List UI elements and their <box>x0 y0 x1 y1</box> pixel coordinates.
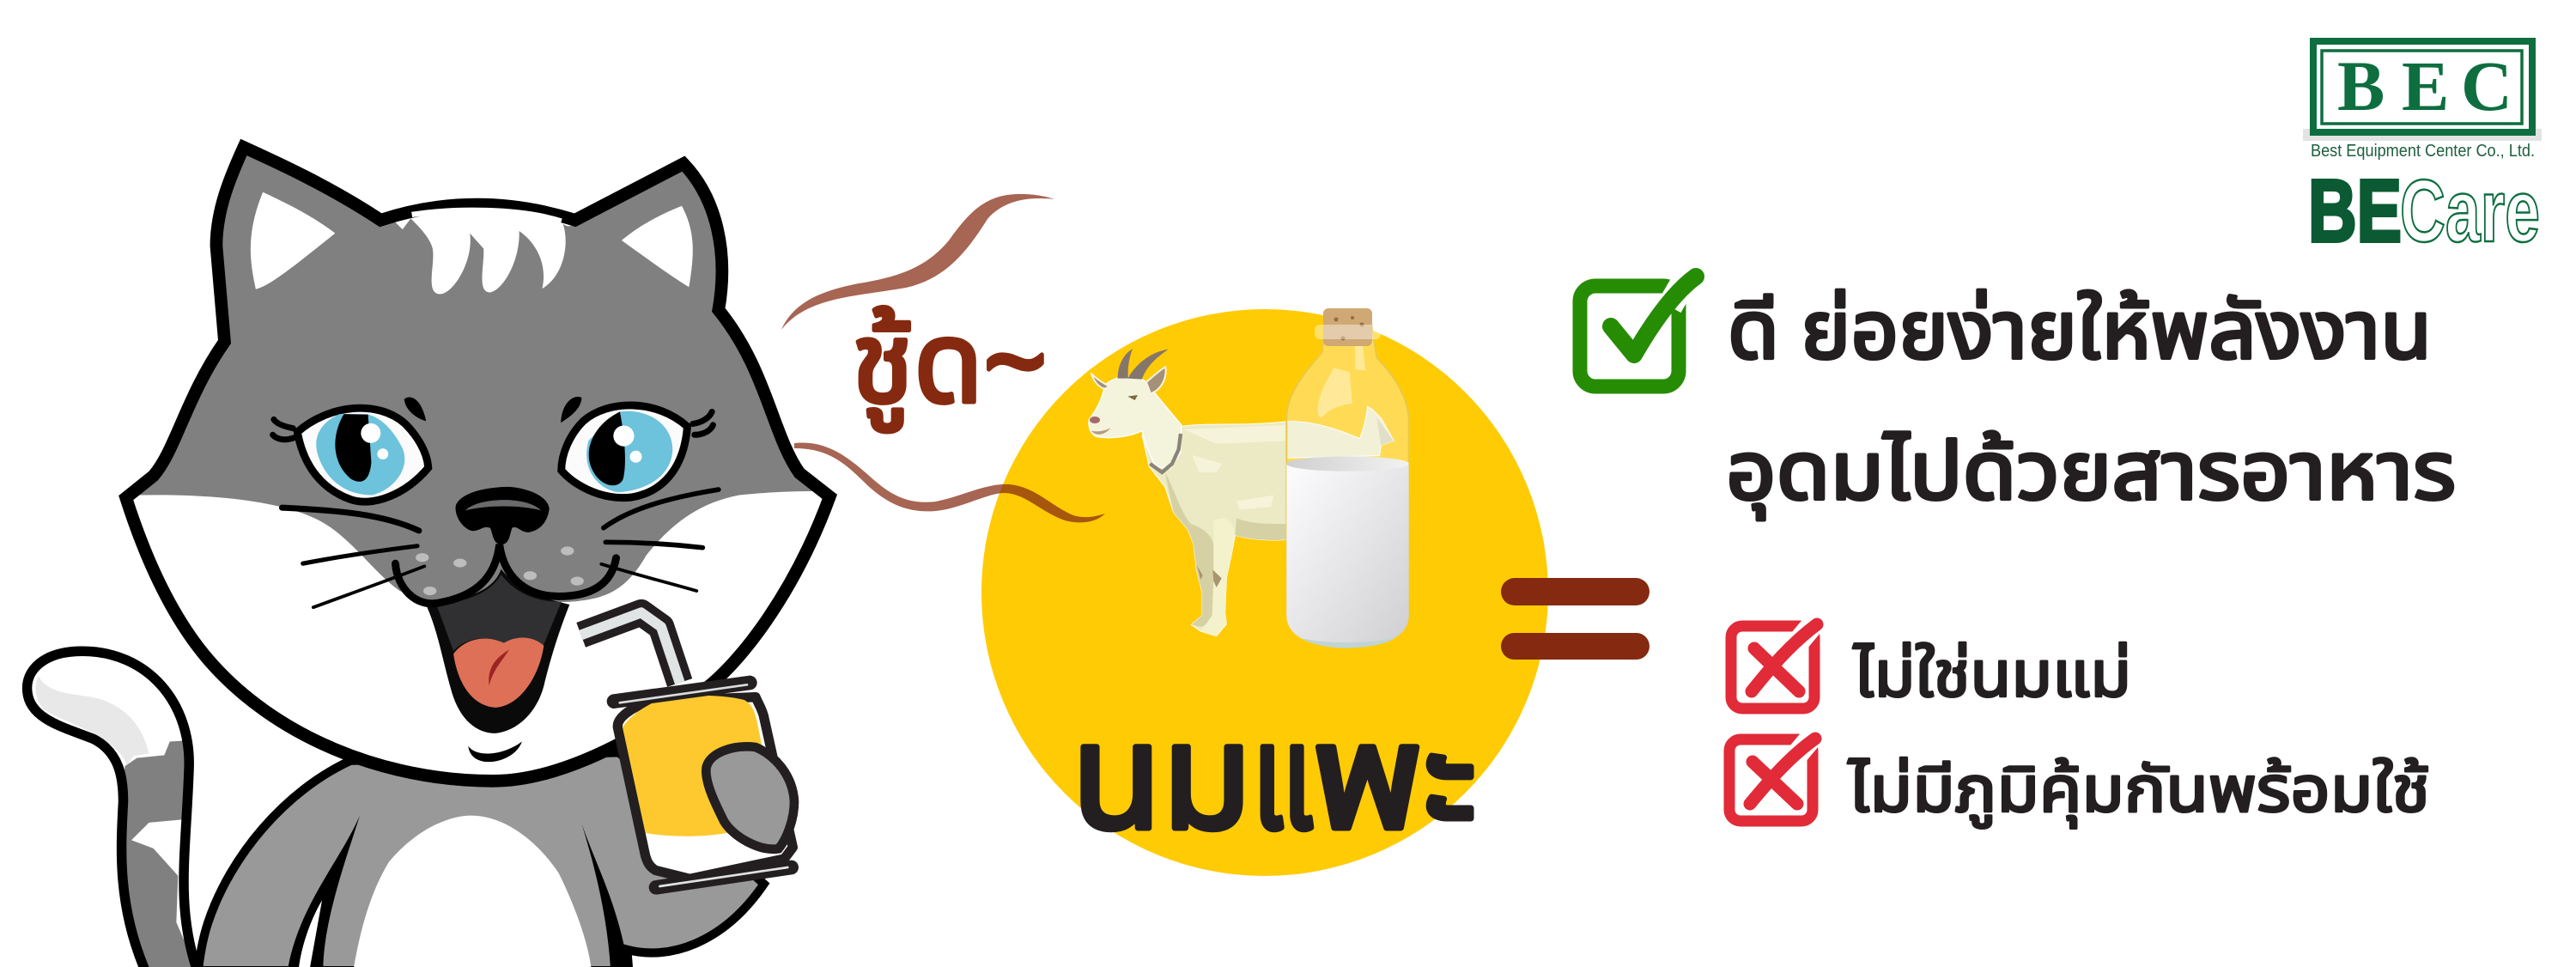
goat nostril <box>1090 417 1100 423</box>
logo: BEC: BEC <box>2337 46 2512 125</box>
text: good point line 2: อุดมไปด้วยสารอาหาร <box>1726 414 2456 536</box>
goat horns <box>1118 349 1169 380</box>
bottle glass <box>1286 320 1409 647</box>
icon: green check <box>1580 263 1702 386</box>
goat body <box>1142 406 1394 636</box>
smell wave: upper <box>781 194 1054 330</box>
cat left eye <box>273 398 428 502</box>
logo: BECare: BE <box>2308 161 2402 260</box>
goat shading <box>1165 472 1286 627</box>
cat tail <box>27 651 197 967</box>
text: bad point 1: ไม่ใช่นมแม่ <box>1853 629 2131 726</box>
bottle reflection <box>1318 342 1365 417</box>
logo: BEC: Best Equipment Center Co., Ltd. <box>2311 142 2535 161</box>
smell wave: lower <box>794 442 1105 522</box>
label: goat milk: พะ <box>1312 672 1477 895</box>
goat head <box>1089 376 1182 468</box>
milk base <box>1303 638 1395 648</box>
cat head <box>110 112 838 781</box>
cat whiskers <box>282 490 719 607</box>
drink and paw <box>581 612 794 887</box>
yellow circle <box>981 309 1548 876</box>
goat mouth <box>1091 428 1110 435</box>
sound word: choot: ชู้ด~ <box>852 283 1048 453</box>
milk surface <box>1286 456 1409 471</box>
goat tail shade <box>1376 418 1394 445</box>
ear inner left <box>251 192 335 289</box>
logo: BEC <box>2303 41 2542 161</box>
equals sign <box>1501 578 1649 660</box>
goat leg spots <box>1197 565 1222 587</box>
cat mouth <box>395 544 617 762</box>
cat right eye <box>561 397 713 498</box>
label: goat milk: แ <box>1252 672 1314 895</box>
cat muzzle spots <box>416 546 584 595</box>
goat eye and nose <box>1127 395 1138 400</box>
illustration: milk bottle <box>1286 320 1409 648</box>
drink: straw <box>581 612 680 683</box>
milk <box>1286 464 1409 648</box>
illustration: goat <box>1089 349 1394 636</box>
icon: red cross 2 <box>1729 725 1825 821</box>
text: good point line 1: ดี ย่อยง่ายให้พลังงาน <box>1728 273 2432 395</box>
logo: BECare <box>2308 161 2540 260</box>
drink: can <box>614 683 793 887</box>
goat collar <box>1150 434 1181 472</box>
label: goat milk: นม <box>1072 672 1252 895</box>
forehead white band thinning the outline <box>412 210 562 222</box>
text: bad point 2: ไม่มีภูมิคุ้มกันพร้อมใช้ <box>1848 745 2430 841</box>
goat ears <box>1091 367 1166 393</box>
illustration: cat <box>27 112 838 967</box>
cat paw <box>706 746 794 849</box>
cat body <box>198 752 764 967</box>
bottle cork <box>1315 308 1381 346</box>
label: goat milk <box>1072 672 1477 895</box>
ear inner right <box>622 206 693 287</box>
goat foreleg <box>1200 518 1235 636</box>
cat nose <box>456 487 550 544</box>
goat highlight <box>1183 425 1285 509</box>
icon: red cross 1 <box>1731 611 1826 709</box>
